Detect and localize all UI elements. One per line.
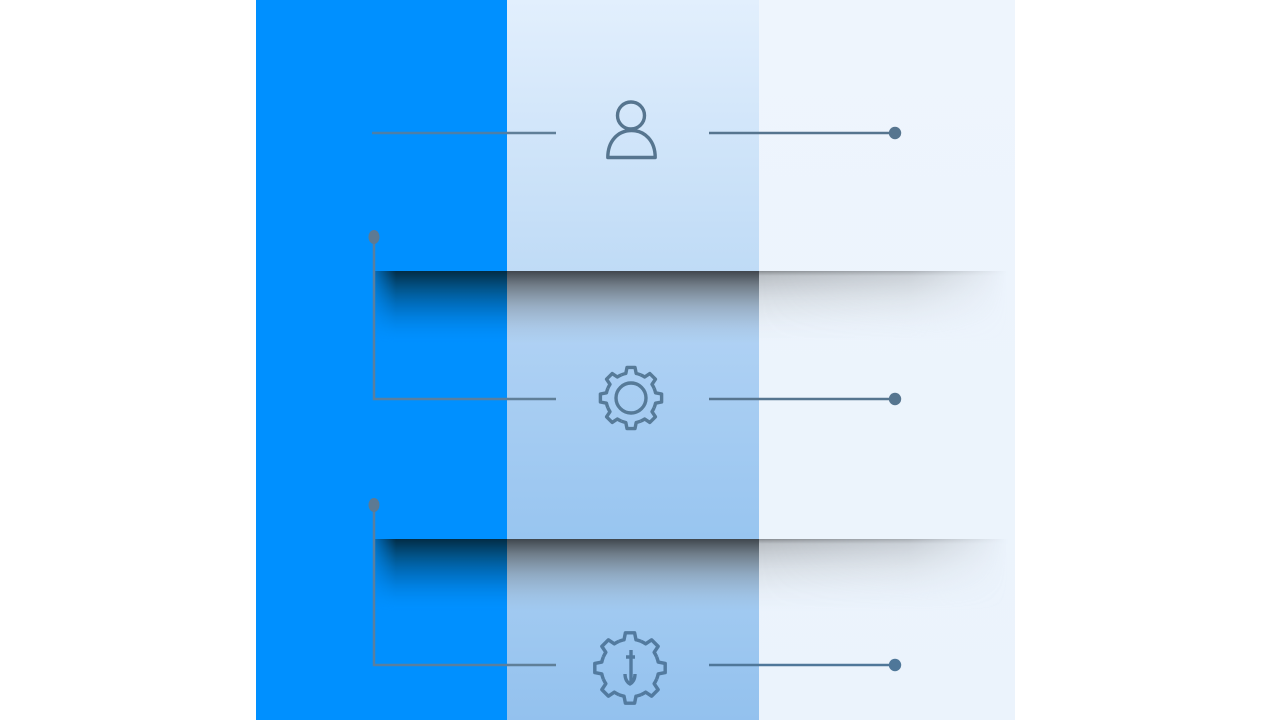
- panel: middle column: [507, 0, 759, 720]
- icon: person: [608, 102, 655, 158]
- icon: gear with vertical arrows: [595, 633, 665, 703]
- panel: right column: [759, 0, 1015, 720]
- shadow: second row fold: [374, 271, 1009, 343]
- infographic canvas: [256, 0, 1015, 720]
- connector: row 3 elbow line with dot: [368, 498, 556, 665]
- icon: gear: [600, 367, 662, 429]
- connector: row 2 elbow line with dot: [368, 230, 556, 399]
- panel: blue left column: [256, 0, 507, 720]
- connector: row 1 left line: [372, 132, 556, 134]
- connector: row 3 right line with dot: [709, 659, 901, 671]
- connector: row 1 right line with dot: [709, 127, 901, 139]
- shadow: third row fold: [374, 539, 1009, 611]
- connector: row 2 right line with dot: [709, 393, 901, 405]
